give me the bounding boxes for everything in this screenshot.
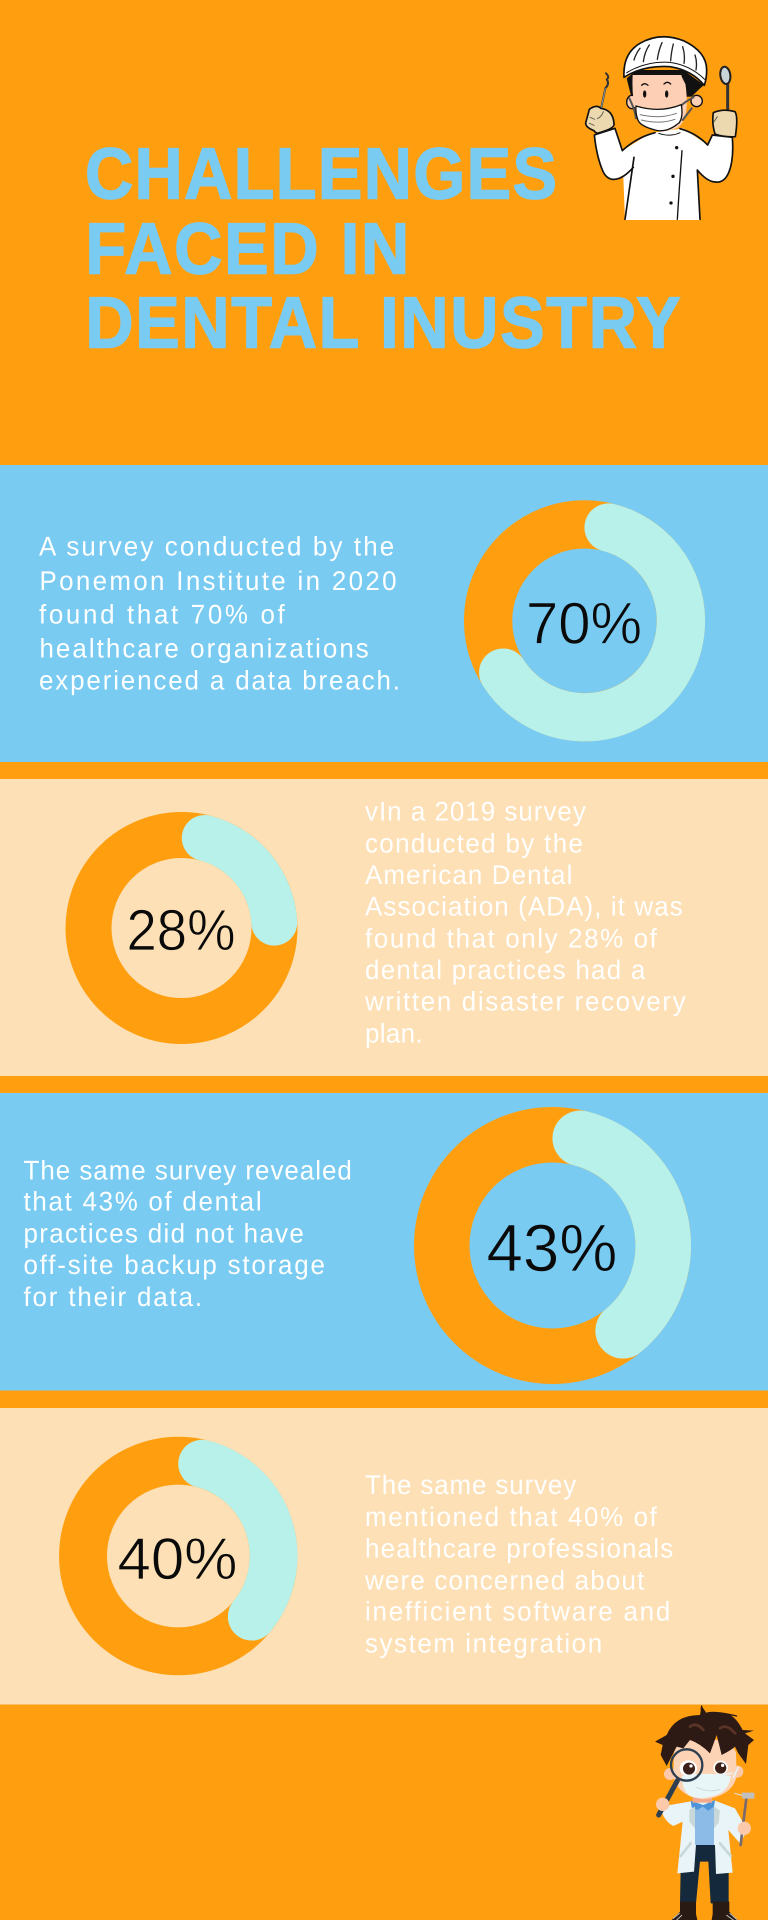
text: off-site backup survey: practices did not have: [24, 1219, 304, 1249]
chart: 28% donut: [88, 835, 274, 1021]
text: disaster recovery survey: American Dental: [365, 860, 572, 890]
text: data breach survey: found that 70% of: [39, 599, 285, 629]
text: inefficient software survey: healthcare professionals: [365, 1533, 673, 1563]
chart: 28% donut: 28%: [126, 898, 236, 963]
text: disaster recovery survey: found that only 28% of: [365, 923, 657, 953]
text: inefficient software survey: [364, 1470, 673, 1659]
text: data breach survey: Ponemon Institute in 2020: [39, 566, 397, 596]
text: disaster recovery survey: plan.: [365, 1019, 423, 1049]
panel: 40% inefficient software: [0, 1408, 768, 1704]
panel: 28% disaster recovery: [0, 779, 768, 1076]
text: off-site backup survey: [24, 1155, 352, 1312]
panel: 70% data breach: [0, 465, 768, 762]
text: data breach survey: experienced a data breach.: [39, 665, 400, 695]
text: inefficient software survey: The same survey: [365, 1470, 577, 1500]
text: off-site backup survey: The same survey revealed: [24, 1155, 352, 1185]
text: disaster recovery survey: vIn a 2019 survey: [365, 797, 586, 827]
text: inefficient software survey: system integration: [365, 1629, 602, 1659]
text: off-site backup survey: that 43% of dental: [24, 1187, 262, 1217]
text: disaster recovery survey: Association (ADA), it was: [365, 892, 683, 922]
text: disaster recovery survey: conducted by the: [365, 828, 583, 858]
panel: 43% off-site backup: [0, 1093, 768, 1390]
chart: 43% donut: [442, 1135, 663, 1356]
title: DENTAL INUSTRY: [85, 282, 681, 363]
icon: dentist with mask holding tools: [586, 37, 737, 220]
icon: young dentist with magnifying glass: [655, 1706, 754, 1920]
text: data breach survey: healthcare organizations: [39, 633, 369, 663]
text: off-site backup survey: for their data.: [24, 1282, 202, 1312]
text: disaster recovery survey: dental practices had a: [365, 955, 646, 985]
chart: 70% donut: 70%: [526, 590, 642, 656]
chart: 40% donut: [83, 1461, 274, 1651]
text: disaster recovery survey: [364, 797, 686, 1049]
text: inefficient software survey: inefficient software and: [365, 1597, 670, 1627]
text: inefficient software survey: were concerned about: [364, 1565, 645, 1595]
chart: 40% donut: 40%: [118, 1526, 238, 1592]
title: CHALLENGES: [85, 133, 557, 214]
title: FACED IN: [85, 208, 409, 289]
text: data breach survey: [39, 532, 400, 695]
text: inefficient software survey: mentioned that 40% of: [365, 1502, 657, 1532]
text: off-site backup survey: off-site backup storage: [24, 1250, 325, 1280]
title: [85, 133, 681, 363]
text: disaster recovery survey: written disaster recovery: [364, 987, 686, 1017]
chart: 70% donut: [488, 524, 681, 717]
chart: 43% donut: 43%: [486, 1211, 618, 1286]
text: data breach survey: A survey conducted by the: [39, 532, 394, 562]
